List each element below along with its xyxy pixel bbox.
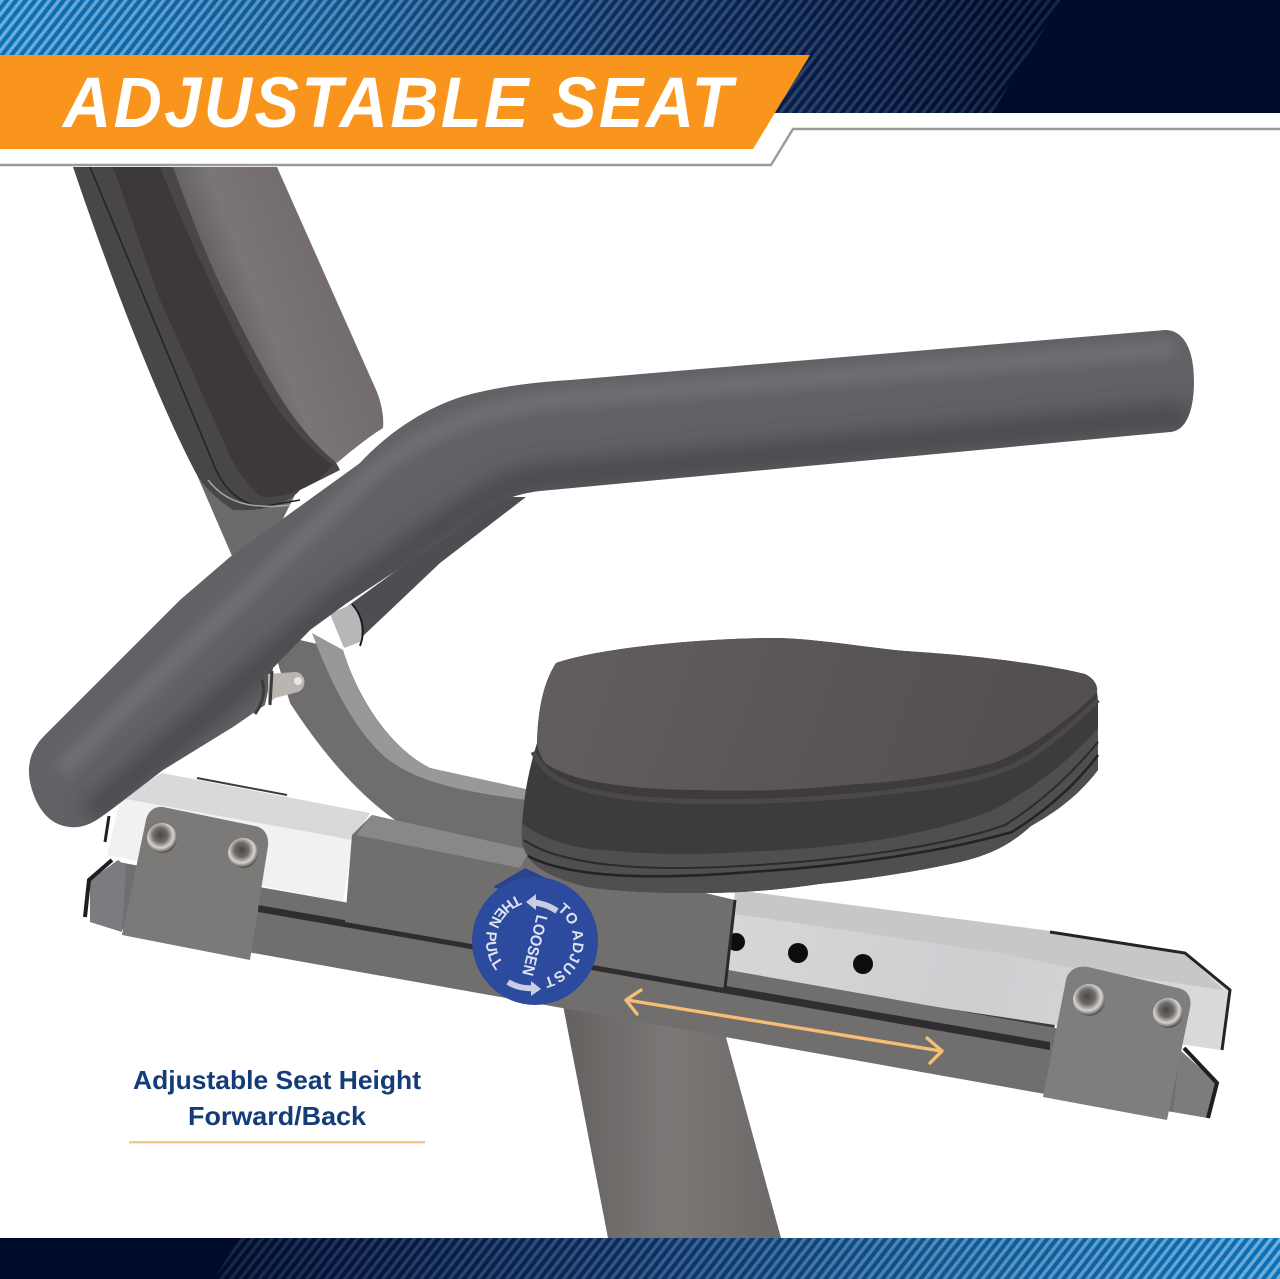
curved seat support frame bbox=[277, 633, 526, 852]
product photo: recumbent bike seat bbox=[28, 166, 1232, 1238]
knob text: then pull: THEN PULL bbox=[486, 896, 522, 970]
caption: adjustable seat height: Adjustable Seat Height bbox=[133, 1065, 421, 1095]
bottom footer band bbox=[0, 1238, 1280, 1279]
top header band bbox=[0, 0, 1280, 113]
double-headed orange arrow bbox=[626, 990, 942, 1063]
lower arm tube bbox=[330, 497, 526, 648]
knob text: to adjust: TO ADJUST bbox=[546, 902, 584, 988]
knob arrows bbox=[508, 894, 557, 996]
header white ribbon with grey outline bbox=[0, 113, 1280, 165]
caption: adjustable seat height bbox=[133, 1065, 421, 1131]
adjustment holes bbox=[727, 933, 873, 974]
seat cushion bbox=[522, 638, 1098, 893]
title banner bbox=[0, 55, 810, 149]
clamp bolt bbox=[255, 671, 304, 714]
left bracket plate bbox=[122, 807, 268, 960]
arm rail tube bbox=[29, 330, 1194, 827]
blue adjustment knob bbox=[472, 868, 598, 1005]
backrest cushion bbox=[73, 167, 383, 560]
lower steel rail bbox=[85, 860, 1217, 1118]
post below the rail bbox=[562, 1000, 781, 1238]
seat carriage bbox=[345, 815, 735, 988]
knob text: loosen: LOOSEN bbox=[518, 913, 550, 977]
silver slide rail, right section bbox=[725, 890, 1230, 1050]
silver slide rail, left section bbox=[105, 773, 370, 902]
caption: adjustable seat height: Forward/Back bbox=[188, 1101, 367, 1131]
caption underline bbox=[129, 1141, 425, 1143]
right bracket plate bbox=[1043, 967, 1190, 1120]
title: ADJUSTABLE SEAT bbox=[61, 63, 737, 142]
